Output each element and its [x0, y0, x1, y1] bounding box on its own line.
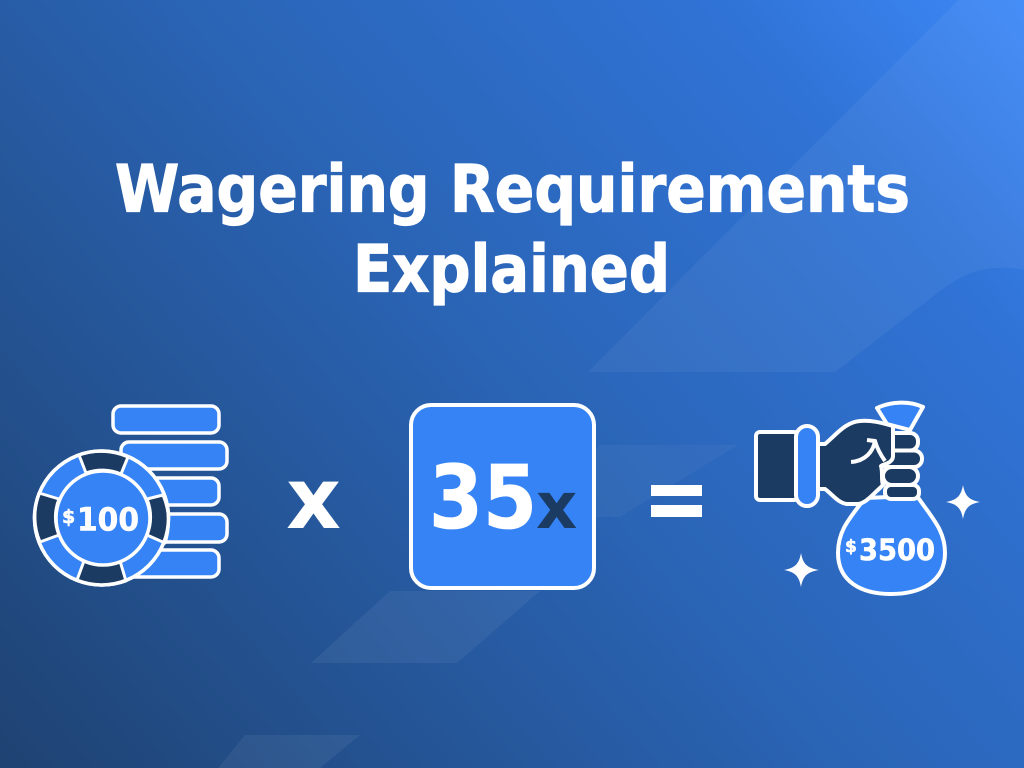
multiplier box: x [536, 470, 577, 544]
fist [818, 421, 922, 504]
title: Explained [353, 232, 670, 308]
money bag value: $ [845, 537, 857, 557]
title [115, 152, 910, 308]
sparkle right [946, 485, 980, 519]
sparkle left [784, 553, 819, 587]
icon: chip stack worth $100 [34, 406, 227, 585]
money bag value: 3500 [859, 533, 935, 567]
multiplier box: 35 [429, 447, 537, 549]
title: Wagering Requirements [115, 152, 910, 228]
equals sign [651, 485, 702, 517]
multiplier box [411, 405, 594, 588]
shirt cuff [756, 426, 818, 506]
icon: hand holding money bag [756, 403, 945, 594]
stacked chips [113, 406, 227, 577]
chip value: $ [62, 506, 75, 528]
round poker chip [34, 451, 169, 585]
money bag [838, 403, 945, 594]
chip value: 100 [77, 500, 139, 538]
multiply sign: x [286, 450, 341, 549]
